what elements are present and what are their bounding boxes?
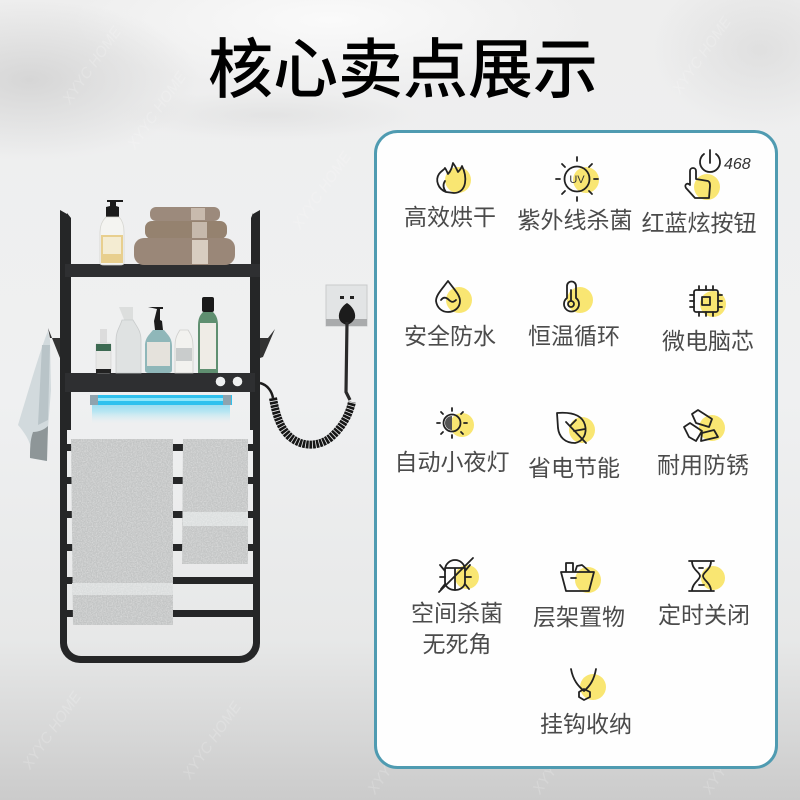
feature: 安全防水 <box>404 281 496 349</box>
feature: 紫外线杀菌 <box>518 157 632 233</box>
towel rails <box>66 444 256 617</box>
top shelf <box>65 264 260 277</box>
feature: 微电脑芯 <box>662 286 754 354</box>
small grey towel <box>182 439 248 564</box>
feature: 恒温循环: 恒温循环 <box>528 323 620 349</box>
feature: 自动小夜灯 <box>394 408 510 475</box>
watermarks: XYYC HOME <box>124 68 190 153</box>
white pump bottle <box>116 307 141 373</box>
rack frame <box>60 210 260 663</box>
middle shelf with control buttons <box>65 373 255 392</box>
stacked brown towels <box>134 207 235 265</box>
feature: 微电脑芯: 微电脑芯 <box>662 328 754 354</box>
small white bottle <box>175 330 193 373</box>
watermarks: XYYC HOME <box>59 23 125 108</box>
watermarks: XYYC HOME <box>289 148 355 233</box>
title: 核心卖点展示 <box>208 33 598 106</box>
plug and coiled power cord <box>260 303 355 445</box>
watermarks: XYYC HOME <box>19 688 85 773</box>
watermarks: XYYC <box>529 754 567 798</box>
feature: 耐用防锈: 耐用防锈 <box>657 452 749 478</box>
panel: core selling points <box>376 132 776 768</box>
feature: 恒温循环 <box>528 282 620 349</box>
feature: 空间杀菌无死角 <box>411 558 503 657</box>
green bottle <box>198 297 218 373</box>
feature: 安全防水: 安全防水 <box>404 323 496 349</box>
left side hook <box>48 328 60 358</box>
dropper bottle <box>96 329 111 373</box>
feature: 红蓝炫按钮: 红蓝炫按钮 <box>642 210 756 236</box>
lotion bottle <box>100 200 124 265</box>
feature: 定时关闭 <box>658 561 750 628</box>
feature: 层架置物: 层架置物 <box>533 604 625 630</box>
product: heated towel rack <box>18 200 275 663</box>
wall socket <box>326 285 367 326</box>
feature: 挂钩收纳: 挂钩收纳 <box>540 711 632 737</box>
teal pump bottle <box>145 307 172 373</box>
feature: 空间杀菌无死角: 空间杀菌 <box>411 600 503 626</box>
feature: 省电节能: 省电节能 <box>528 455 620 481</box>
top shelf items <box>100 200 235 265</box>
watermarks: XYYC <box>364 754 402 798</box>
feature: 层架置物 <box>533 563 625 630</box>
feature: 高效烘干 <box>404 163 496 230</box>
feature: 红蓝炫按钮: 468 <box>724 156 751 173</box>
right side hook <box>260 329 275 358</box>
watermarks: XYYC HOME <box>669 13 735 98</box>
middle shelf items <box>96 297 218 373</box>
feature: 省电节能 <box>528 413 620 481</box>
UV lamp with blue glow <box>90 395 232 424</box>
feature: 红蓝炫按钮 <box>642 150 756 236</box>
feature: 高效烘干: 高效烘干 <box>404 204 496 230</box>
watermarks: XYYC <box>699 754 737 798</box>
large grey towel <box>71 439 173 625</box>
feature: 紫外线杀菌: UV <box>569 174 585 186</box>
hanging towel on left hook <box>18 331 51 461</box>
feature: 空间杀菌无死角: 无死角 <box>422 631 492 657</box>
feature: 耐用防锈 <box>657 410 749 478</box>
watermarks: XYYC HOME <box>179 698 245 783</box>
feature: 定时关闭: 定时关闭 <box>658 602 750 628</box>
feature: 自动小夜灯: 自动小夜灯 <box>394 449 510 475</box>
feature: 紫外线杀菌: 紫外线杀菌 <box>518 207 632 233</box>
feature: 挂钩收纳 <box>540 669 632 737</box>
